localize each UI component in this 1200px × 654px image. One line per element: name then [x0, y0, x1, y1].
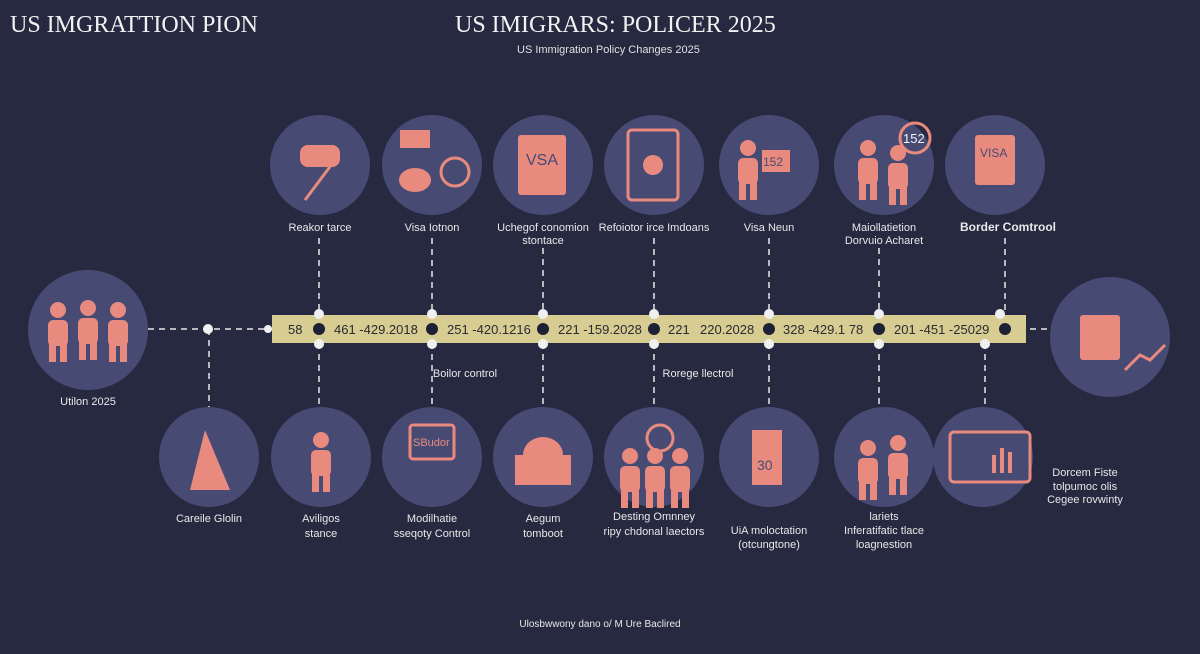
- labels: Desting Omnney: [613, 511, 695, 523]
- icons: 152: [763, 155, 783, 169]
- timeline bar: [203, 309, 1026, 349]
- labels: UiA moloctation: [731, 525, 807, 537]
- labels: stontace: [522, 235, 564, 247]
- labels: Cegee rovwinty: [1047, 494, 1123, 506]
- icons: VISA: [980, 146, 1007, 160]
- labels: Aegum: [526, 513, 560, 525]
- labels: Modilhatie: [407, 513, 457, 525]
- timeline bar: 251 -420.1216: [447, 322, 531, 337]
- subtitle: US Immigration Policy Changes 2025: [517, 44, 700, 56]
- circles: [28, 115, 1170, 507]
- timeline bar: 58: [288, 322, 302, 337]
- timeline bar: 328 -429.1 78: [783, 322, 863, 337]
- labels: Refoiotor irce Imdoans: [599, 222, 710, 234]
- labels: Visa Iotnon: [405, 222, 459, 234]
- title center: US IMIGRARS: POLICER 2025: [455, 12, 776, 38]
- labels: loagnestion: [856, 539, 912, 551]
- labels: Border Comtrool: [960, 220, 1056, 234]
- labels: Careile Glolin: [176, 513, 242, 525]
- labels: lariets: [869, 511, 899, 523]
- labels: Reakor tarce: [289, 222, 351, 234]
- labels: Visa Neun: [744, 222, 794, 234]
- labels: Maiollatietion: [852, 222, 916, 234]
- labels: stance: [305, 528, 337, 540]
- icons: VSA: [526, 152, 558, 169]
- labels: Inferatifatic tlace: [844, 525, 924, 537]
- timeline bar: 221: [668, 322, 690, 337]
- timeline bar: 221 -159.2028: [558, 322, 642, 337]
- timeline bar: 201 -451 -25029: [894, 322, 989, 337]
- labels: Rorege llectrol: [663, 368, 733, 380]
- labels: (otcungtone): [738, 539, 800, 551]
- labels: Dorvuio Acharet: [845, 235, 923, 247]
- labels: Dorcem Fiste: [1052, 467, 1118, 479]
- labels: Aviligos: [302, 513, 340, 525]
- labels: Uchegof conomion: [497, 222, 589, 234]
- icons: 30: [757, 457, 773, 473]
- labels: ripy chdonal laectors: [604, 526, 705, 538]
- labels: sseqoty Control: [394, 528, 470, 540]
- labels: Ulosbwwony dano o/ M Ure Baclired: [519, 619, 681, 630]
- labels: tomboot: [523, 528, 563, 540]
- icons: [48, 123, 1165, 508]
- timeline bar: 461 -429.2018: [334, 322, 418, 337]
- icons: 152: [903, 131, 925, 146]
- timeline bar: 220.2028: [700, 322, 754, 337]
- labels: [60, 220, 1123, 630]
- labels: tolpumoc olis: [1053, 481, 1118, 493]
- title left: US IMGRATTION PION: [10, 12, 258, 38]
- labels: Boilor control: [433, 368, 497, 380]
- icons: SBudor: [413, 437, 450, 449]
- labels: Utilon 2025: [60, 396, 116, 408]
- dashed connectors: [148, 238, 1048, 408]
